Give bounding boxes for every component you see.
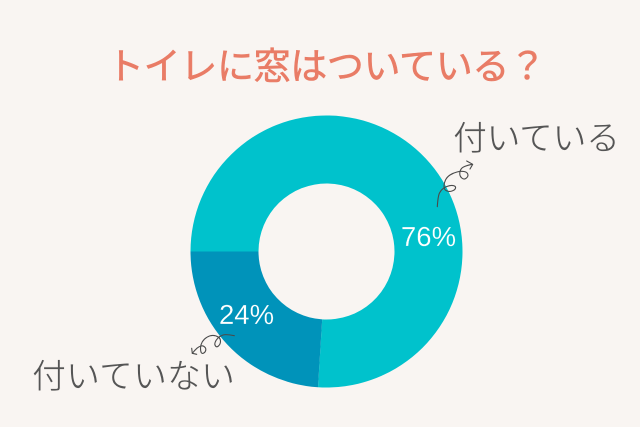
title: トイレに窓はついている？	[107, 46, 546, 87]
icon: curly arrow to 付いていない	[192, 335, 234, 354]
icon: curly arrow to 付いている	[437, 161, 473, 207]
value label: 76%: 76%	[401, 221, 456, 252]
category label: 付いている: 付いている	[453, 120, 620, 158]
donut chart	[190, 115, 463, 387]
value label: 24%: 24%	[219, 299, 274, 330]
segment: 付いている 76%	[190, 115, 463, 387]
category label: 付いていない: 付いていない	[32, 358, 235, 396]
segment: 付いていない 24%	[190, 252, 322, 387]
